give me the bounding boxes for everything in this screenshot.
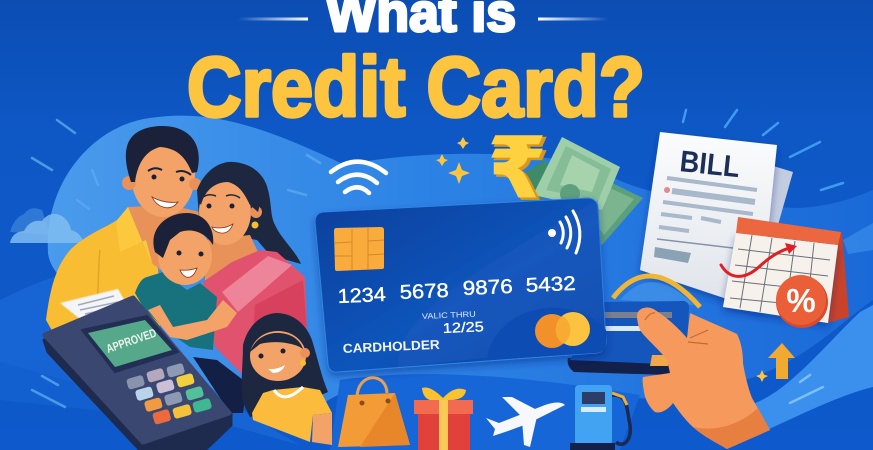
cardholder name: CARDHOLDER [342,337,441,356]
percent badge [776,276,828,328]
icon: cloud [10,208,84,243]
icon: gift box [414,387,473,450]
icon: rupee symbol: ₹ [491,121,549,219]
main credit card [315,198,606,372]
icon: airplane [486,397,565,447]
card network logo [535,312,590,348]
red trend arrow [721,248,790,276]
card number: 5678 [399,280,449,304]
mother [197,162,307,380]
decorative rays right [683,110,843,403]
screen text: APPROVED [104,326,158,356]
calendar page [723,233,838,323]
payment terminal [44,289,231,450]
paper [640,132,777,310]
title: Credit Card?: Credit Card? [187,40,645,134]
icon: wifi signal [331,162,386,193]
daughter [242,313,332,445]
young boy [135,213,237,350]
valid thru label: VALIC THRU [422,310,476,321]
girl hair back [242,313,328,417]
family illustration [46,126,332,445]
card number: 9876 [462,276,513,300]
father shirt [46,207,160,345]
saree [203,250,307,380]
card number: 5432 [525,273,576,297]
icon: fuel pump [570,385,630,450]
girl head [250,331,306,381]
bill document [640,132,793,310]
boy arm [148,300,237,340]
contactless arc [613,276,700,307]
icon: upward arrow [756,343,795,382]
bill text lines [657,178,757,248]
icon: sparkles [436,137,470,184]
boy head [152,254,164,266]
contactless icon [548,211,580,253]
icon: shopping bag [338,378,410,447]
terminal body [44,340,231,450]
girl shirt [252,387,332,442]
mother hair back [197,162,301,264]
seated dark lap [193,357,247,413]
hand holding card [637,308,770,449]
icon: banknotes [517,137,643,245]
card number: 1234 [337,284,386,308]
screen bezel [82,316,178,372]
icon: rupee symbol: ₹ [488,119,546,217]
father collar and neck [128,205,200,270]
screen [88,320,172,367]
calendar back [828,232,849,323]
boy shirt [135,272,217,350]
heading: BILL: BILL [678,145,741,184]
receipt [60,289,130,319]
mother head [199,179,251,245]
calendar header [736,217,841,245]
card number [337,273,576,308]
back sheet [760,165,793,225]
expiry date: 12/25 [442,318,484,336]
calendar with percent badge [721,217,849,328]
second card in hand [568,301,689,375]
keypad [126,363,212,425]
calendar with percent badge: % [786,282,816,319]
father head [131,133,195,217]
mother neck [205,235,258,280]
chip [334,227,384,271]
title: What is [238,0,608,43]
decorative rays left [32,120,320,407]
father [46,126,201,345]
